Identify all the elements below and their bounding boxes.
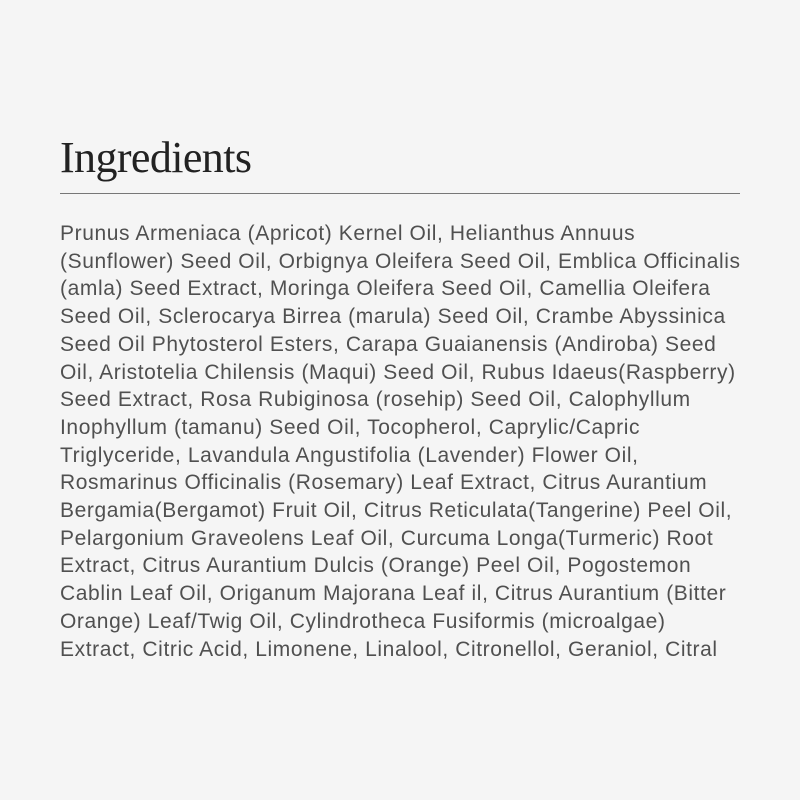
text block: ingredients list: (Sunflower) Seed Oil, Orbignya Oleifera Seed Oil, Emblica Officinalis	[60, 250, 741, 273]
text block: ingredients list: Inophyllum (tamanu) Seed Oil, Tocopherol, Caprylic/Capric	[60, 416, 640, 439]
text block: ingredients list: Pelargonium Graveolens Leaf Oil, Curcuma Longa(Turmeric) Root	[60, 527, 713, 550]
text block: ingredients list	[60, 222, 741, 661]
text block: ingredients list: Triglyceride, Lavandula Angustifolia (Lavender) Flower Oil,	[60, 444, 639, 467]
text block: ingredients list: Oil, Aristotelia Chilensis (Maqui) Seed Oil, Rubus Idaeus(Raspberry)	[60, 361, 736, 384]
text block: ingredients list: Orange) Leaf/Twig Oil, Cylindrotheca Fusiformis (microalgae)	[60, 610, 666, 633]
text block: ingredients list: Seed Oil, Sclerocarya Birrea (marula) Seed Oil, Crambe Abyssinica	[60, 305, 726, 328]
text block: ingredients list: Extract, Citrus Aurantium Dulcis (Orange) Peel Oil, Pogostemon	[60, 554, 691, 577]
text block: ingredients list: Bergamia(Bergamot) Fruit Oil, Citrus Reticulata(Tangerine) Peel Oil,	[60, 499, 732, 522]
text block: ingredients list: (amla) Seed Extract, Moringa Oleifera Seed Oil, Camellia Oleifera	[60, 277, 711, 300]
text block: ingredients list: Cablin Leaf Oil, Origanum Majorana Leaf il, Citrus Aurantium (Bitter	[60, 582, 726, 605]
text block: ingredients list: Seed Extract, Rosa Rubiginosa (rosehip) Seed Oil, Calophyllum	[60, 388, 691, 411]
title: Ingredients	[60, 133, 251, 182]
text block: ingredients list: Seed Oil Phytosterol Esters, Carapa Guaianensis (Andiroba) Seed	[60, 333, 716, 356]
text block: ingredients list: Extract, Citric Acid, Limonene, Linalool, Citronellol, Geraniol, Citral	[60, 638, 718, 661]
text block: ingredients list: Rosmarinus Officinalis (Rosemary) Leaf Extract, Citrus Aurantium	[60, 471, 707, 494]
text block: ingredients list: Prunus Armeniaca (Apricot) Kernel Oil, Helianthus Annuus	[60, 222, 635, 245]
